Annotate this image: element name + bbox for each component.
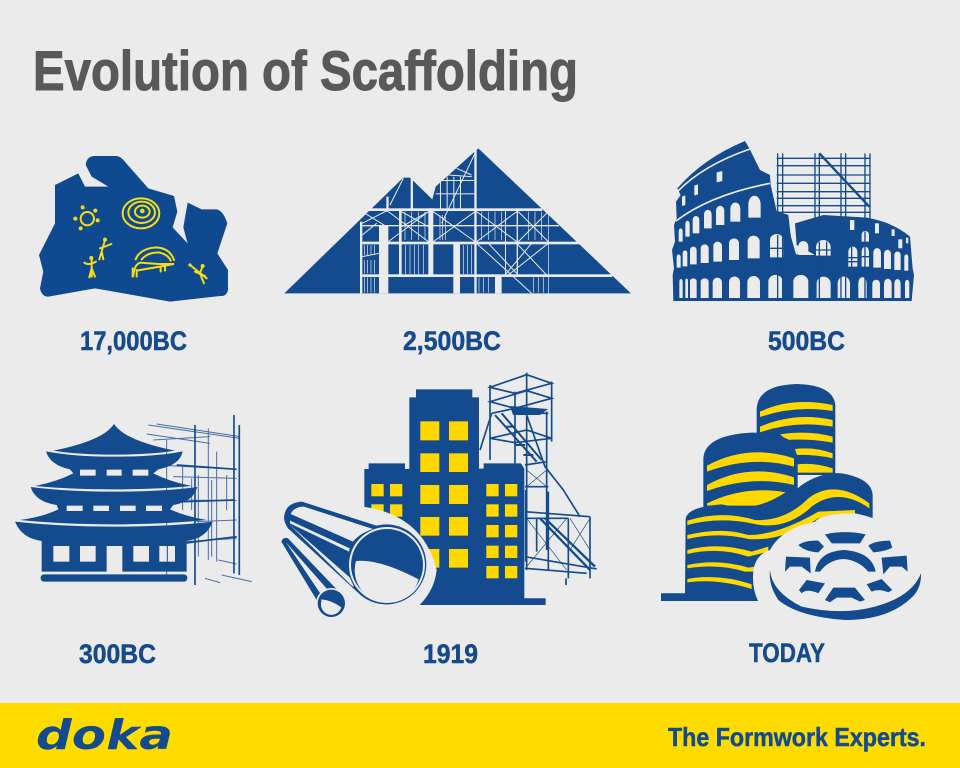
label: 500BC: 500BC (768, 326, 845, 356)
building with windows (364, 389, 546, 605)
logo: doka: doka (36, 711, 173, 759)
icon: modern towers and round stadium (661, 384, 925, 623)
icon: cave painting rock (39, 156, 228, 302)
label: 17,000BC: 17,000BC (80, 326, 187, 356)
icon: pagoda (15, 415, 252, 585)
pipes (278, 495, 437, 619)
title: Evolution of Scaffolding (33, 39, 578, 102)
label: TODAY: TODAY (749, 638, 825, 668)
label: 2,500BC: 2,500BC (403, 326, 501, 356)
label: 1919: 1919 (423, 639, 478, 669)
icon: 1919 building with tubes and scaffold (278, 373, 597, 619)
icon: pyramid with scaffolding (284, 148, 631, 293)
tagline: The Formwork Experts. (668, 722, 926, 752)
label: 300BC: 300BC (79, 639, 156, 669)
icon: colosseum (672, 141, 914, 301)
scaffold tower (480, 373, 597, 585)
footer bar (0, 703, 960, 768)
